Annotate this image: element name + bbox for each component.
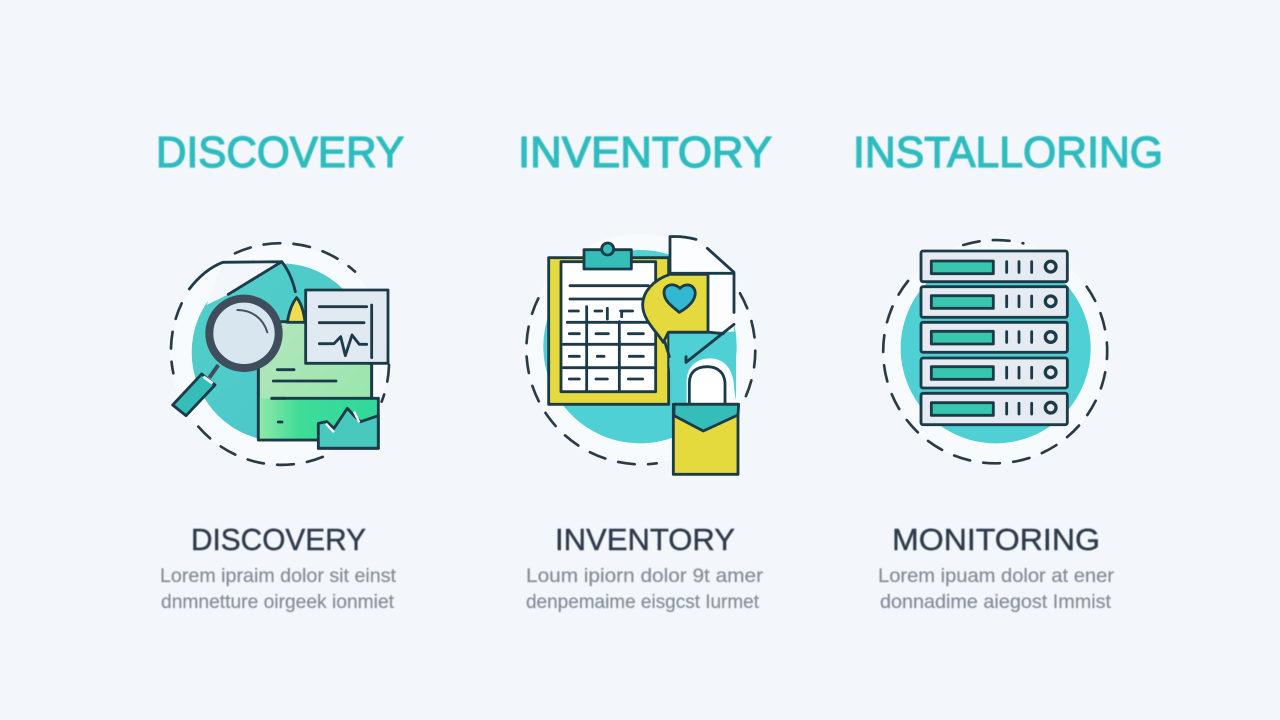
document text lines <box>272 370 336 422</box>
label: Monitoring: MONITORING <box>892 522 1100 557</box>
yellow heart bubble <box>643 274 708 342</box>
description: Monitoring: donnadime aiegost Immist <box>880 592 1112 613</box>
heading: Installoring: INSTALLORING <box>853 128 1163 177</box>
teal background circle <box>543 250 737 443</box>
pale halo <box>170 244 390 464</box>
small area chart <box>318 398 378 448</box>
magnifying glass <box>173 299 279 416</box>
teal panel with check <box>665 324 736 405</box>
description: Monitoring: Lorem ipuam dolor at ener <box>878 566 1115 587</box>
pen tip <box>287 298 305 322</box>
pale halo <box>884 240 1108 464</box>
server unit 4 <box>921 358 1067 388</box>
clip <box>584 250 631 269</box>
description: Discovery: Lorem ipraim dolor sit einst <box>160 566 397 587</box>
server unit 1 <box>921 251 1067 282</box>
dashed ring <box>171 243 389 465</box>
green document <box>258 322 372 440</box>
band edge <box>272 394 378 403</box>
form lines and table <box>563 286 656 391</box>
bright green band <box>259 398 378 448</box>
icon: inventory clipboard and lock <box>525 234 755 474</box>
dashed ring <box>883 240 1107 463</box>
description: Discovery <box>160 566 397 613</box>
folded top outline <box>189 262 295 294</box>
dashed ring <box>526 293 755 464</box>
server unit 3 <box>921 322 1067 352</box>
document frame <box>258 322 372 440</box>
padlock <box>673 358 739 474</box>
teal background circle <box>901 253 1091 443</box>
description: Discovery: dnmnetture oirgeek ionmiet <box>161 592 395 613</box>
pale halo <box>525 234 755 464</box>
white page <box>670 236 734 332</box>
description: Inventory: denpemaime eisgcst Iurmet <box>526 592 760 613</box>
description: Inventory <box>526 566 764 613</box>
teal background circle <box>192 263 370 441</box>
heading: Inventory: INVENTORY <box>518 128 772 177</box>
label: Discovery: DISCOVERY <box>191 522 366 557</box>
icon: discovery magnifier and documents <box>170 243 390 465</box>
report card with pulse <box>306 290 388 363</box>
heading: Discovery: DISCOVERY <box>156 128 404 177</box>
description: Inventory: Loum ipiorn dolor 9t amer <box>526 566 764 587</box>
server unit 5 <box>921 393 1067 425</box>
label: Inventory: INVENTORY <box>555 522 735 557</box>
server unit 2 <box>921 287 1067 317</box>
description: Monitoring <box>878 566 1115 613</box>
pale corner above fold <box>207 262 282 305</box>
icon: monitoring server rack <box>883 240 1108 464</box>
clipboard <box>549 243 669 404</box>
